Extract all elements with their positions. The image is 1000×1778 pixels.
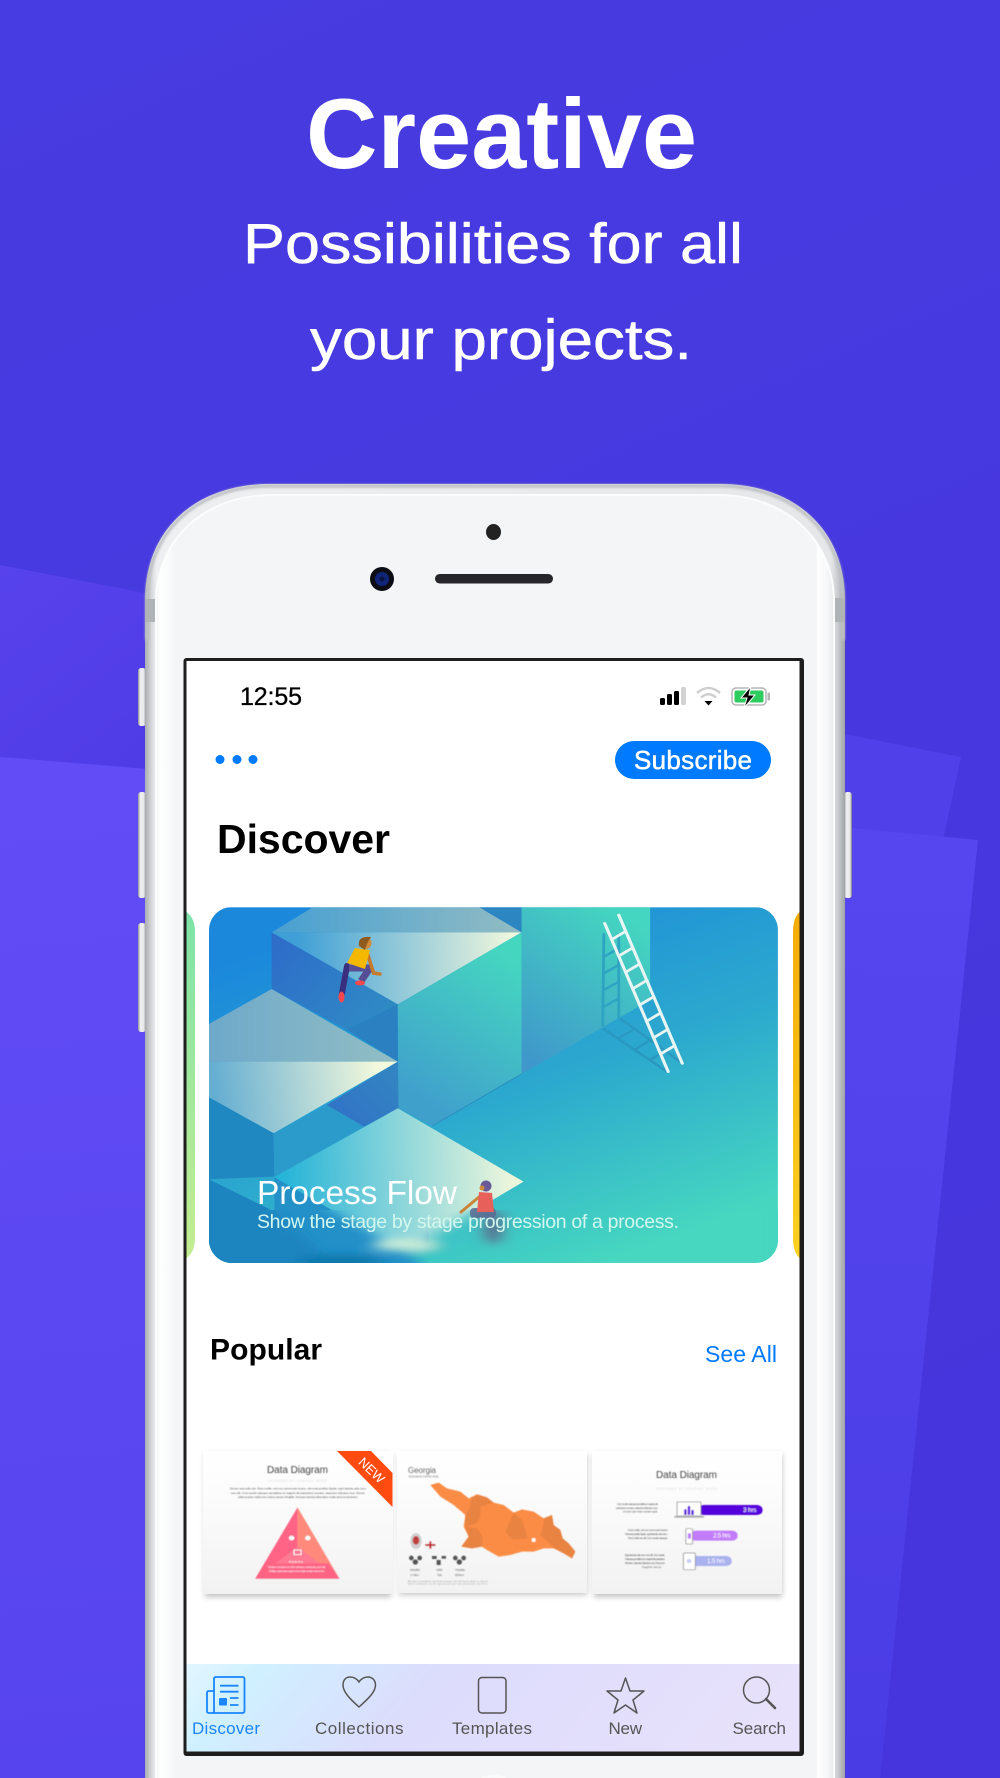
ladder shadow <box>603 933 680 1072</box>
thumbnail: data diagram bars: 1.5 hrs <box>707 1558 726 1565</box>
thumbnail: georgia map: CAPITAL <box>436 1569 444 1572</box>
more dots <box>216 755 258 764</box>
ladder <box>605 915 682 1072</box>
title <box>243 78 743 372</box>
tab: Collections <box>315 1677 404 1738</box>
seated figure <box>461 1180 496 1218</box>
thumbnail: georgia map: POPULATION <box>410 1569 420 1572</box>
card title: Process Flow <box>257 1175 458 1212</box>
climbing figure <box>338 937 380 1002</box>
left peek card <box>186 912 195 1258</box>
tab: Discover <box>192 1677 260 1738</box>
thumbnail: data diagram bars: Eget lacinia odio sem nec elit. Cum sociis. <box>625 1553 665 1557</box>
new ribbon: NEW <box>356 1454 388 1487</box>
thumbnail: data diagram triangle: POSITA <box>289 1560 304 1564</box>
thumbnail: data diagram bars: Data Diagram <box>656 1470 717 1481</box>
link: See All: See All <box>705 1341 777 1367</box>
thumbnail: data diagram bars: Sed mollis nec elit. Cum sociis natoque. <box>628 1536 668 1540</box>
front camera <box>370 567 394 591</box>
thumbnail: georgia map: DESIGNED BY GRAPHIC NODE <box>408 1476 439 1478</box>
feature card: process flow <box>180 907 778 1277</box>
phone body <box>145 484 845 1778</box>
tab: Search <box>732 1677 786 1738</box>
thumbnail: data diagram bars: 3 hrs <box>743 1507 757 1514</box>
thumbnail: georgia map: Source information can be replaced with your own presentation notes here. <box>408 1582 488 1586</box>
thumbnail: data diagram triangle <box>203 1451 393 1597</box>
thumbnail: data diagram bars: Ut enim ad minim veniam quis. <box>623 1510 658 1514</box>
new ribbon <box>337 1451 392 1507</box>
bars and device icons <box>674 1502 763 1570</box>
battery icon <box>732 686 770 708</box>
heading: Popular: Popular <box>210 1334 322 1366</box>
signal icon <box>660 687 686 705</box>
tab: Discover: Discover <box>192 1719 260 1738</box>
tab: Search: Search <box>732 1719 786 1738</box>
thumbnail: data diagram bars: Natoque penatibus et magnis dis parturient. <box>625 1557 665 1561</box>
tab: New: New <box>608 1719 643 1738</box>
thumbnail: georgia map: Tbilisi <box>437 1574 442 1577</box>
thumbnail: data diagram triangle: DESIGNED BY GRAPHIC NODE <box>268 1479 328 1483</box>
thumbnail: georgia map: TOTAL AREA <box>455 1569 465 1572</box>
status bar <box>240 683 770 711</box>
thumbnail: data diagram bars: 2.5 hrs <box>713 1533 731 1540</box>
thumbnail: data diagram bars <box>592 1451 782 1597</box>
subheading line 1: Possibilities for all <box>243 212 743 276</box>
thumbnail: data diagram bars: Duis mollis, est non commodo luctus. <box>628 1528 668 1532</box>
thumbnail: data diagram triangle: Nullam id dolor id nibh ultricies vehicula ut id elit. <box>268 1565 326 1569</box>
thumbnail: data diagram triangle: Donec sed odio dui. Duis mollis, est non commodo luctus, nisi erat porttitor ligula, eget lacinia odio sem <box>230 1486 366 1490</box>
thumbnail: georgia map: 3.7 Million <box>410 1574 420 1577</box>
thumbnail: data diagram bars: Sagittis lacus. <box>642 1565 662 1569</box>
thumbnail: georgia map: Georgia <box>408 1466 437 1475</box>
card subtitle: Show the stage by stage progression of a process. <box>257 1211 679 1233</box>
heading: Discover: Discover <box>217 816 390 862</box>
thumbnail: data diagram triangle: nec elit. Cum sociis natoque penatibus et magnis dis parturient montes, nascetur ridiculus mus. Donec <box>231 1491 365 1495</box>
isometric illustration <box>180 907 778 1277</box>
thumbnail: georgia map: 69,700 km2 <box>455 1574 465 1577</box>
tab bar <box>186 1664 800 1752</box>
thumbnail: data diagram triangle: Nullam quis risus eget urna mollis ornare vel eu leo. <box>269 1569 325 1573</box>
wifi icon <box>697 688 720 706</box>
subheading line 2: your projects. <box>310 308 692 372</box>
screen <box>180 658 804 1756</box>
phone <box>138 484 852 1778</box>
thumbnail: data diagram triangle: ullamcorper nulla non metus auctor fringilla. Aenean lacinia bibendum nulla sed consectetur. <box>238 1495 358 1499</box>
tab: Templates <box>452 1678 532 1738</box>
thumbnail: georgia map: Map data is provided for illustration purposes only and may be edited as required. <box>408 1580 488 1583</box>
thumbnail: data diagram triangle: Data Diagram <box>267 1465 328 1476</box>
subscribe button <box>615 741 771 779</box>
side buttons <box>138 668 852 1032</box>
frosted blur band <box>209 1210 778 1263</box>
heading: Creative: Creative <box>306 78 697 189</box>
tab: Templates: Templates <box>452 1719 532 1738</box>
thumbnail: data diagram bars: DESIGNED BY GRAPHIC NODE <box>656 1487 718 1491</box>
thumbnail: data diagram bars: Nisi erat porttitor ligula, eget lacinia odio sem. <box>625 1532 668 1536</box>
time: 12:55 <box>240 683 302 711</box>
thumbnail: data diagram bars: parturient montes, nascetur ridiculus mus. <box>616 1506 658 1510</box>
map <box>409 1483 575 1565</box>
speaker <box>435 574 553 584</box>
earpiece sensor <box>486 524 501 540</box>
subscribe button: Subscribe <box>634 745 752 775</box>
thumbnail: data diagram bars: Montes, nascetur ridiculus mus. Donec id. <box>625 1561 665 1565</box>
right peek card <box>793 912 800 1258</box>
home button <box>464 1776 524 1778</box>
tab: New <box>607 1678 644 1738</box>
thumbnail: georgia map <box>397 1451 587 1595</box>
thumbnail: data diagram bars: Cum sociis natoque penatibus magnis dis <box>617 1502 659 1506</box>
tab: Collections: Collections <box>315 1719 404 1738</box>
